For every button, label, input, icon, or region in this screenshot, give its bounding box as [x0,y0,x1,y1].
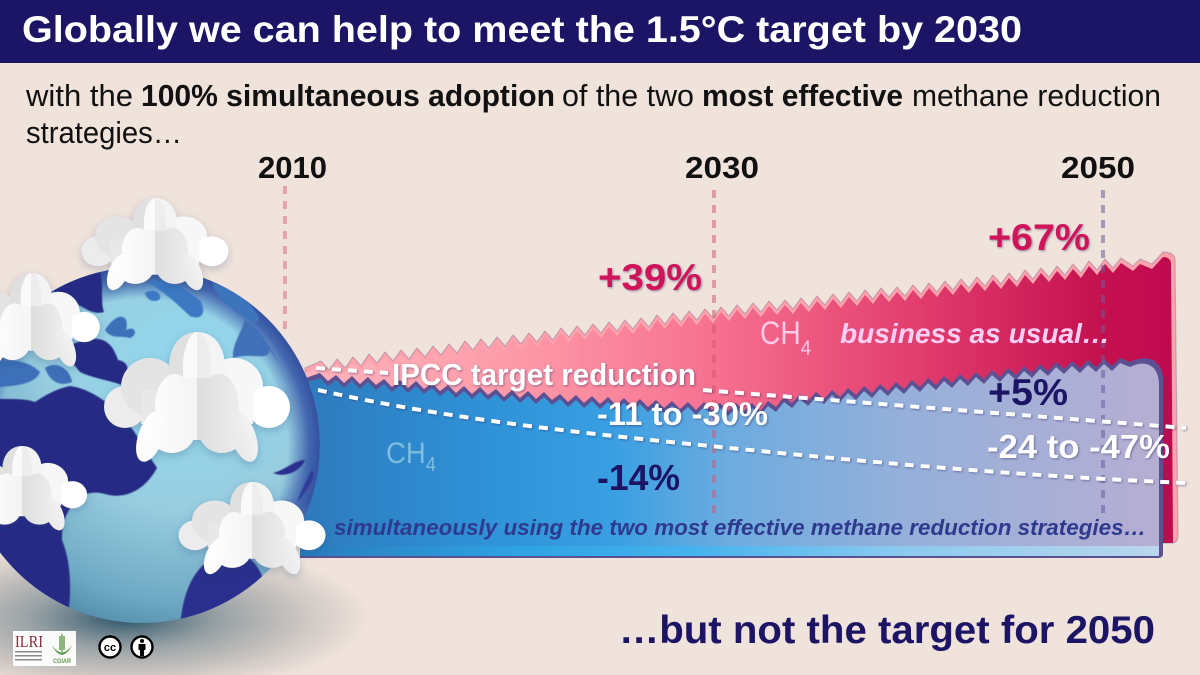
cloud: centre large [104,332,290,466]
timeline marker 2050 [1101,190,1105,516]
pink area: business as usual methane [305,252,1178,543]
subtitle text: with the [25,78,133,113]
icon: attribution [132,636,152,658]
timeline marker 2030 [712,190,716,520]
icon: creative commons: cc [104,642,116,654]
subtitle text [25,78,1161,150]
subtitle text: most effective [702,78,903,113]
continents: mid blue [147,280,203,317]
title banner: Globally we can help to meet the 1.5°C target by 2030 [22,9,1022,50]
timeline marker 2010 [283,186,287,332]
label: -14%: -14% [597,457,680,498]
cloud: left [0,273,100,369]
label: CH4 on pink area: CH [760,315,806,351]
year labels: 2010 [258,150,327,185]
label: business as usual: business as usual… [840,318,1110,349]
label: CH4 on blue area: CH [386,437,429,470]
label: CH4 on pink area: 4 [801,337,811,360]
label: +39%: +39% [598,257,702,298]
label: -24 to -47%: -24 to -47% [987,428,1170,465]
subtitle text: strategies… [26,115,182,150]
label: simultaneously using strategies: simultaneously using the two most effective methane reduction strategies… [334,515,1146,540]
cloud: lower left [0,446,87,533]
title banner [0,0,1200,63]
label: +67%: +67% [988,217,1090,258]
subtitle text: of the two [562,78,694,113]
logo: ILRI and CGIAR: ILRI [15,632,43,651]
globe shadow [0,540,370,675]
icon: creative commons [100,636,120,658]
cloud: lower right [179,482,325,577]
label: CH4 on blue area: 4 [426,454,436,476]
conclusion text: …but not the target for 2050 [619,609,1155,652]
continents: dark [0,386,157,630]
chart labels [334,217,1170,540]
year labels: 2030 [685,150,759,185]
label: +5%: +5% [988,372,1068,413]
blue area: simultaneous strategies methane [300,358,1163,558]
cloud: top [82,198,228,293]
logo: ILRI and CGIAR [13,631,76,666]
subtitle text: 100% simultaneous adoption [141,78,555,113]
label: IPCC target reduction: IPCC target reduction [392,357,696,392]
IPCC target dashed lines [316,368,1186,483]
year labels [258,150,1135,185]
subtitle text: methane reduction [912,78,1161,113]
logo: ILRI and CGIAR: CGIAR [53,659,72,665]
label: -11 to -30%: -11 to -30% [597,396,768,432]
year labels: 2050 [1061,150,1135,185]
globe [0,267,320,640]
